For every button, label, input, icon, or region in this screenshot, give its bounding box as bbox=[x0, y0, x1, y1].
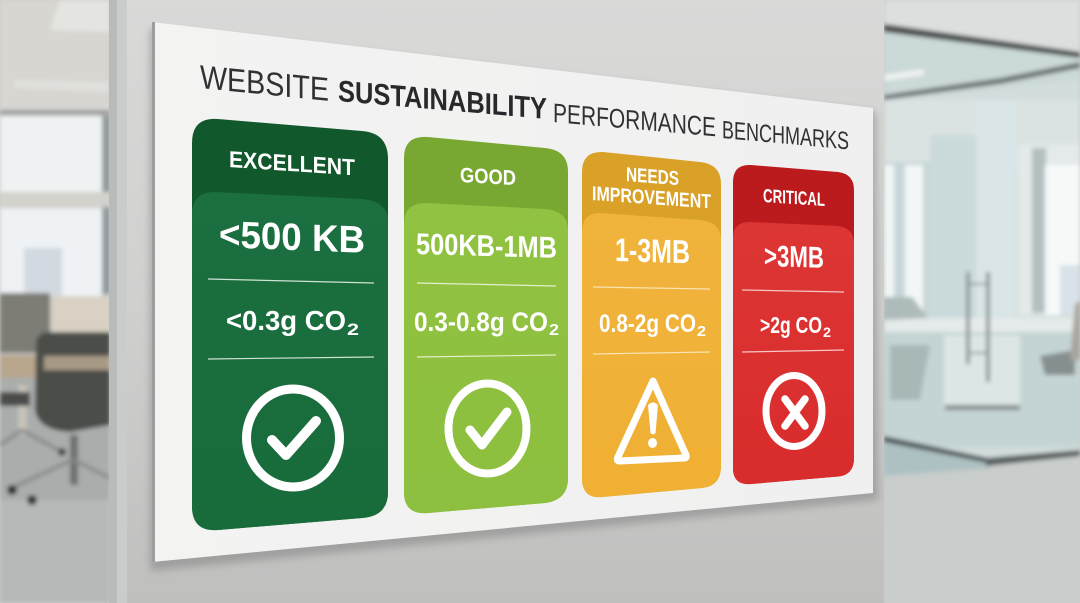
title: SUSTAINABILITY bbox=[338, 75, 547, 126]
title: PERFORMANCE bbox=[553, 98, 716, 142]
wall column bbox=[109, 0, 884, 603]
carbon: under 0.3g: 2 bbox=[347, 320, 359, 339]
background: office interior right bbox=[884, 0, 1080, 603]
label: needs improvement: IMPROVEMENT bbox=[592, 183, 712, 213]
label: needs improvement: NEEDS bbox=[626, 164, 679, 190]
carbon: over 2g: >2g CO bbox=[760, 312, 822, 338]
label: critical: CRITICAL bbox=[763, 186, 825, 211]
page weight: over 3MB: >3MB bbox=[764, 240, 824, 275]
icon: x circle bbox=[766, 376, 822, 446]
carbon: 0.3 to 0.8g: 0.3-0.8g CO bbox=[414, 307, 548, 337]
carbon: over 2g: 2 bbox=[823, 324, 831, 340]
panel: excellent bbox=[192, 119, 388, 530]
icon: check circle bbox=[448, 384, 526, 474]
label: excellent: EXCELLENT bbox=[229, 146, 355, 180]
poster shadow bbox=[150, 28, 878, 571]
page weight: under 500 KB: <500 KB bbox=[219, 214, 365, 262]
title: BENCHMARKS bbox=[722, 116, 849, 155]
title bbox=[200, 59, 849, 155]
panel: critical bbox=[733, 165, 854, 484]
title: WEBSITE bbox=[200, 59, 329, 109]
carbon: 0.3 to 0.8g: 2 bbox=[549, 322, 559, 339]
background: office interior left bbox=[0, 0, 110, 603]
label: good: GOOD bbox=[460, 164, 516, 190]
icon: warning triangle bbox=[617, 381, 686, 461]
panel: good bbox=[404, 137, 568, 513]
carbon: 0.8 to 2g: 0.8-2g CO bbox=[599, 310, 696, 338]
panel: needs improvement bbox=[582, 152, 721, 497]
page weight: 500KB to 1MB: 500KB-1MB bbox=[416, 228, 557, 265]
icon: check circle bbox=[246, 389, 340, 487]
label: needs improvement bbox=[592, 164, 712, 213]
carbon: under 0.3g: <0.3g CO bbox=[226, 305, 346, 336]
page weight: 1 to 3MB: 1-3MB bbox=[615, 231, 690, 270]
poster board bbox=[152, 22, 873, 562]
carbon: 0.8 to 2g: 2 bbox=[697, 323, 706, 340]
